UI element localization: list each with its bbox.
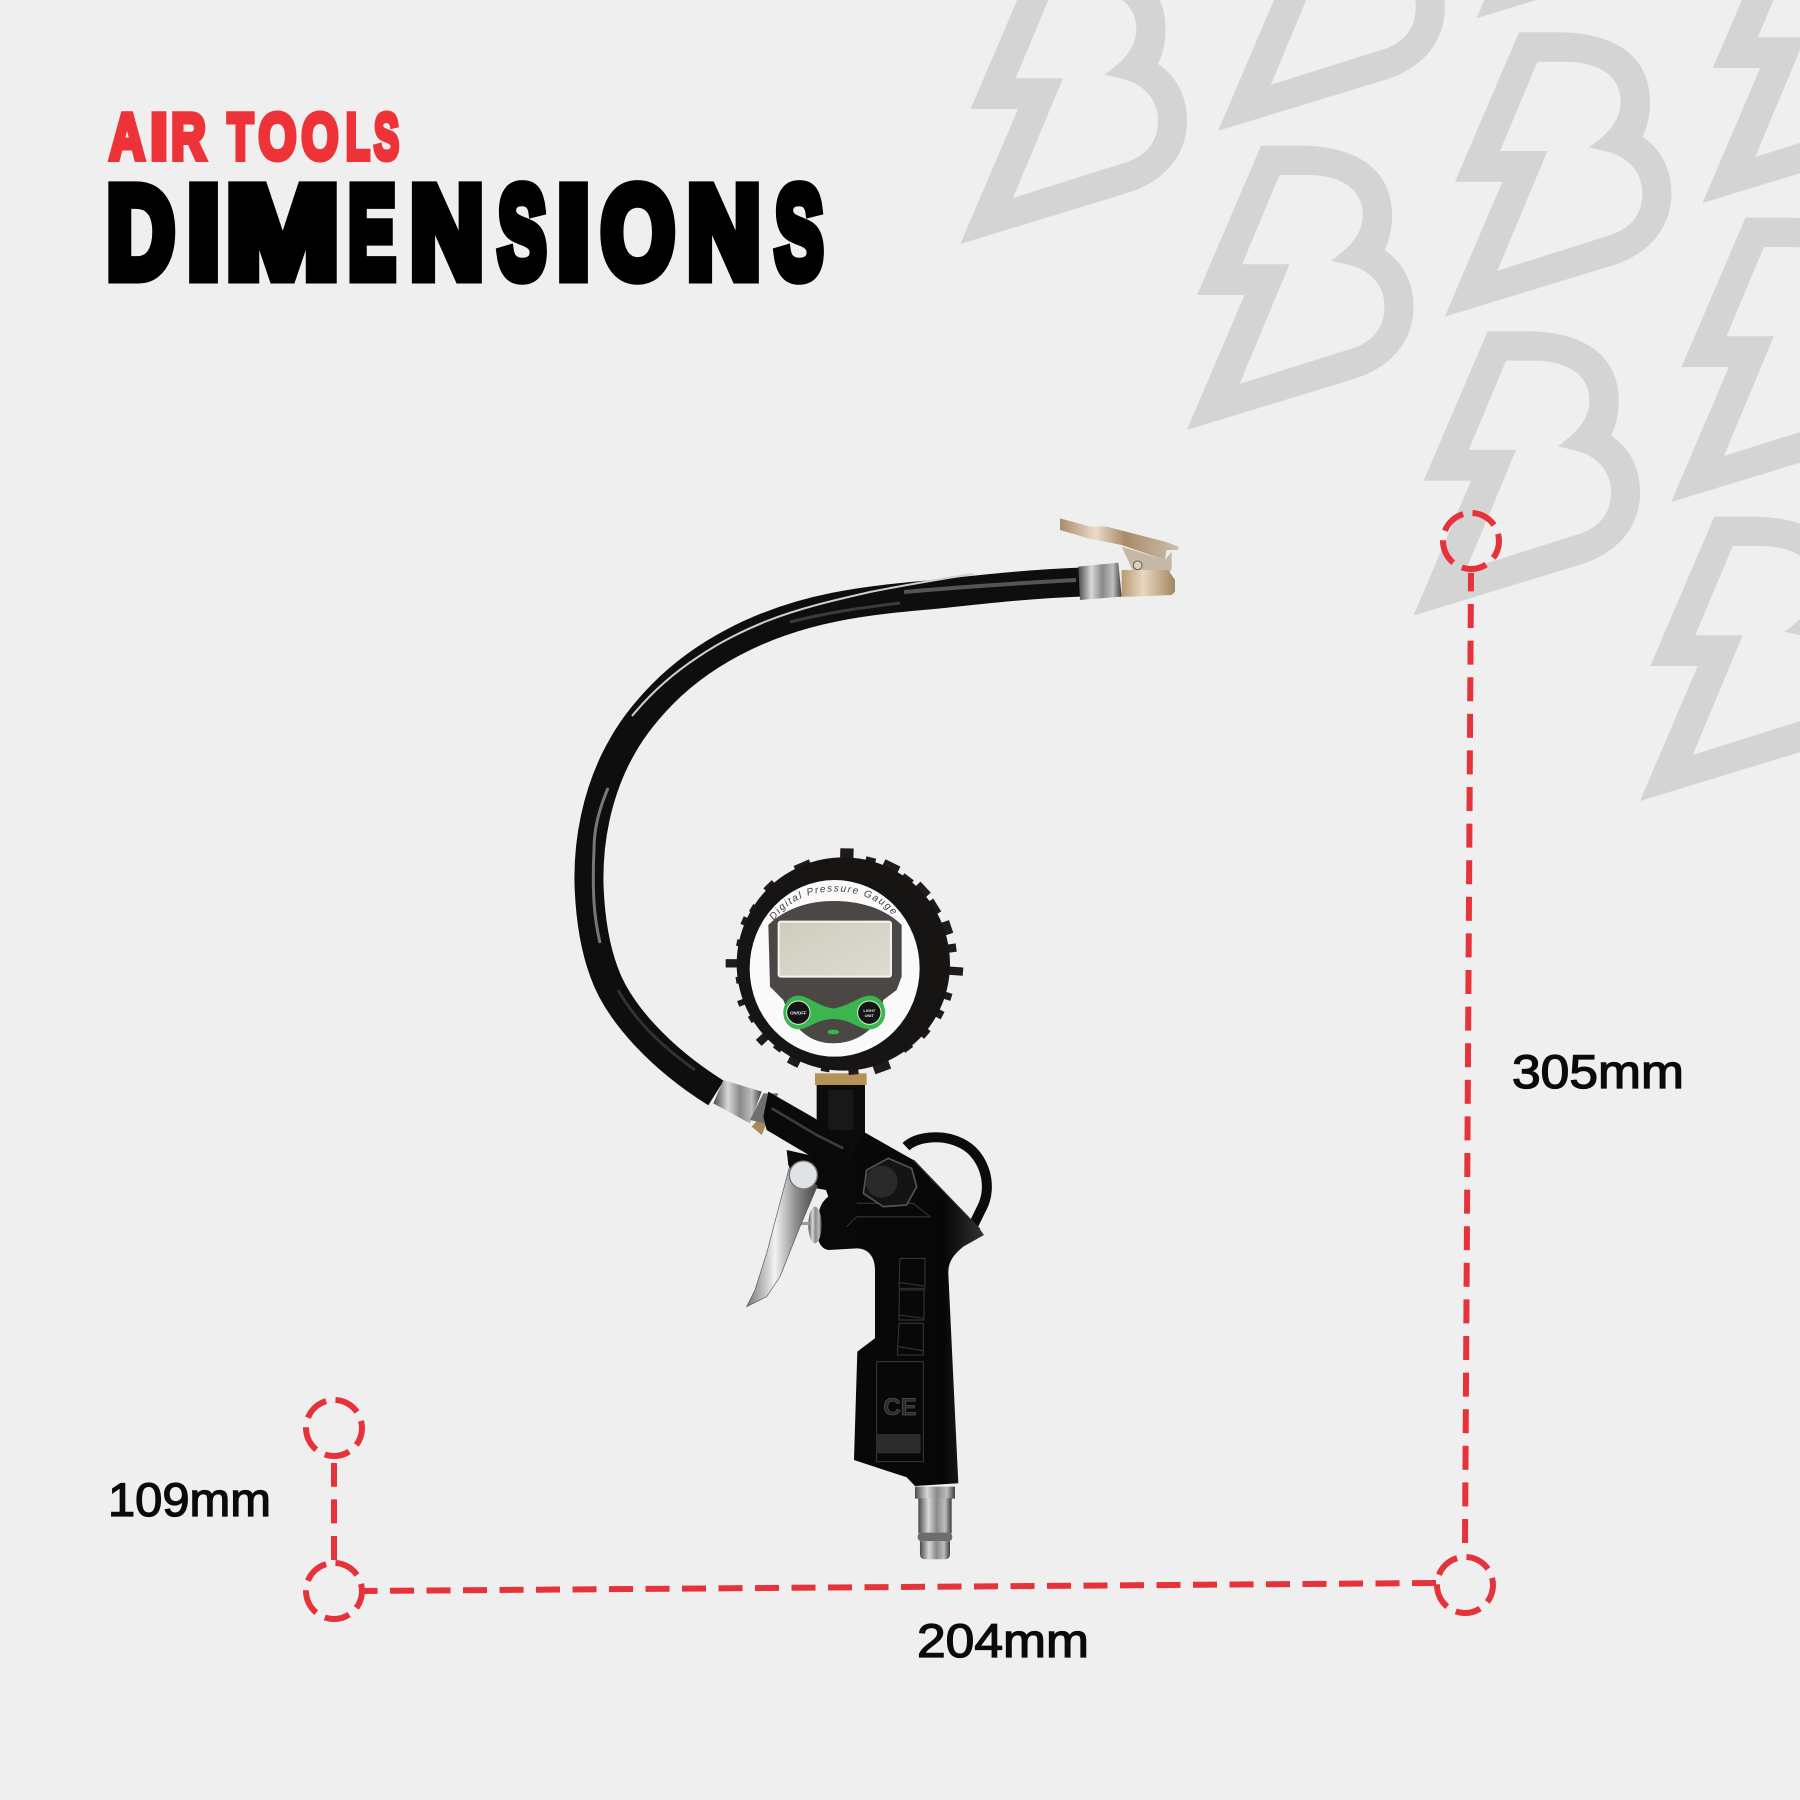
ring handle bbox=[906, 1137, 987, 1227]
hose barrel bbox=[763, 1092, 850, 1168]
hex bolt bbox=[863, 1158, 917, 1207]
title: dimensions: D bbox=[107, 161, 174, 305]
product: digital gauge bbox=[726, 848, 964, 1085]
brass collar bbox=[752, 1113, 768, 1135]
chuck rivet bbox=[1133, 561, 1142, 570]
title: dimensions: I bbox=[187, 161, 220, 305]
title: dimensions: N bbox=[687, 161, 761, 305]
trigger screw bbox=[808, 1207, 822, 1243]
rubber treads bbox=[726, 848, 963, 1075]
dimension: 305mm marker bbox=[1442, 512, 1500, 1543]
white face bbox=[750, 880, 920, 1057]
LCD screen bbox=[779, 922, 891, 977]
grip ridges bbox=[877, 1258, 925, 1462]
connector barrel bbox=[918, 1498, 952, 1533]
body bevels bbox=[847, 1160, 980, 1229]
product: gun body bbox=[713, 1080, 987, 1559]
label: 109mm: 109mm bbox=[108, 1473, 271, 1526]
gauge stem bbox=[817, 1080, 865, 1170]
green indicator bbox=[827, 1030, 839, 1034]
title: air tools: A bbox=[110, 100, 145, 173]
chuck ferrule bbox=[1078, 563, 1122, 600]
title: air tools: T bbox=[228, 100, 253, 173]
rubber ring bbox=[737, 857, 950, 1071]
connector tip bbox=[920, 1541, 950, 1559]
title: air tools: L bbox=[346, 100, 370, 173]
dimension: 109mm marker bbox=[305, 1399, 363, 1620]
stem highlight bbox=[828, 1090, 853, 1130]
chuck lever bbox=[1060, 518, 1178, 560]
title: dimensions: E bbox=[348, 161, 396, 305]
trigger pin bbox=[794, 1222, 811, 1225]
chuck bracket bbox=[1122, 547, 1172, 575]
connector groove bbox=[918, 1533, 952, 1541]
CE mark: CE bbox=[883, 1394, 917, 1421]
product: inflator chuck bbox=[1060, 518, 1178, 600]
on/off label: ON/OFF bbox=[790, 1010, 807, 1015]
title: air tools: O bbox=[302, 100, 338, 173]
title: dimensions: I bbox=[557, 161, 590, 305]
ferrule collar bbox=[750, 1093, 778, 1123]
label: 305mm: 305mm bbox=[1512, 1045, 1684, 1098]
bolt cap bbox=[866, 1166, 898, 1198]
title: dimensions: M bbox=[226, 161, 339, 305]
dimension: 204mm marker bbox=[363, 1556, 1494, 1614]
chuck body bbox=[1122, 570, 1175, 597]
green button plate bbox=[783, 996, 885, 1029]
dark panel bbox=[768, 901, 902, 1043]
brass fitting bbox=[815, 1073, 867, 1085]
gauge label: Digital Pressure Gauge bbox=[770, 886, 896, 920]
light/unit button bbox=[858, 1001, 881, 1024]
light/unit label: LIGHT bbox=[863, 1008, 876, 1013]
title: air tools: I bbox=[150, 100, 168, 173]
title: dimensions: S bbox=[498, 161, 546, 305]
title: dimensions: N bbox=[410, 161, 484, 305]
title: dimensions: O bbox=[601, 161, 674, 305]
model plate bbox=[877, 1434, 921, 1453]
lower ferrule bbox=[713, 1080, 762, 1123]
title: air tools: O bbox=[259, 100, 296, 173]
trigger pivot bbox=[789, 1161, 817, 1189]
background logo pattern bbox=[960, 0, 1800, 801]
connector hex bbox=[915, 1487, 955, 1499]
label: 204mm: 204mm bbox=[917, 1614, 1089, 1667]
on/off button bbox=[787, 1001, 810, 1024]
barrel highlight bbox=[772, 1108, 843, 1148]
trigger lever bbox=[747, 1167, 817, 1307]
light/unit label: UNIT bbox=[865, 1013, 875, 1018]
product: hose bbox=[589, 574, 1082, 1093]
title: air tools: S bbox=[374, 100, 399, 173]
title: air tools: R bbox=[171, 100, 206, 173]
title: dimensions: S bbox=[775, 161, 823, 305]
pistol body bbox=[787, 1132, 984, 1486]
